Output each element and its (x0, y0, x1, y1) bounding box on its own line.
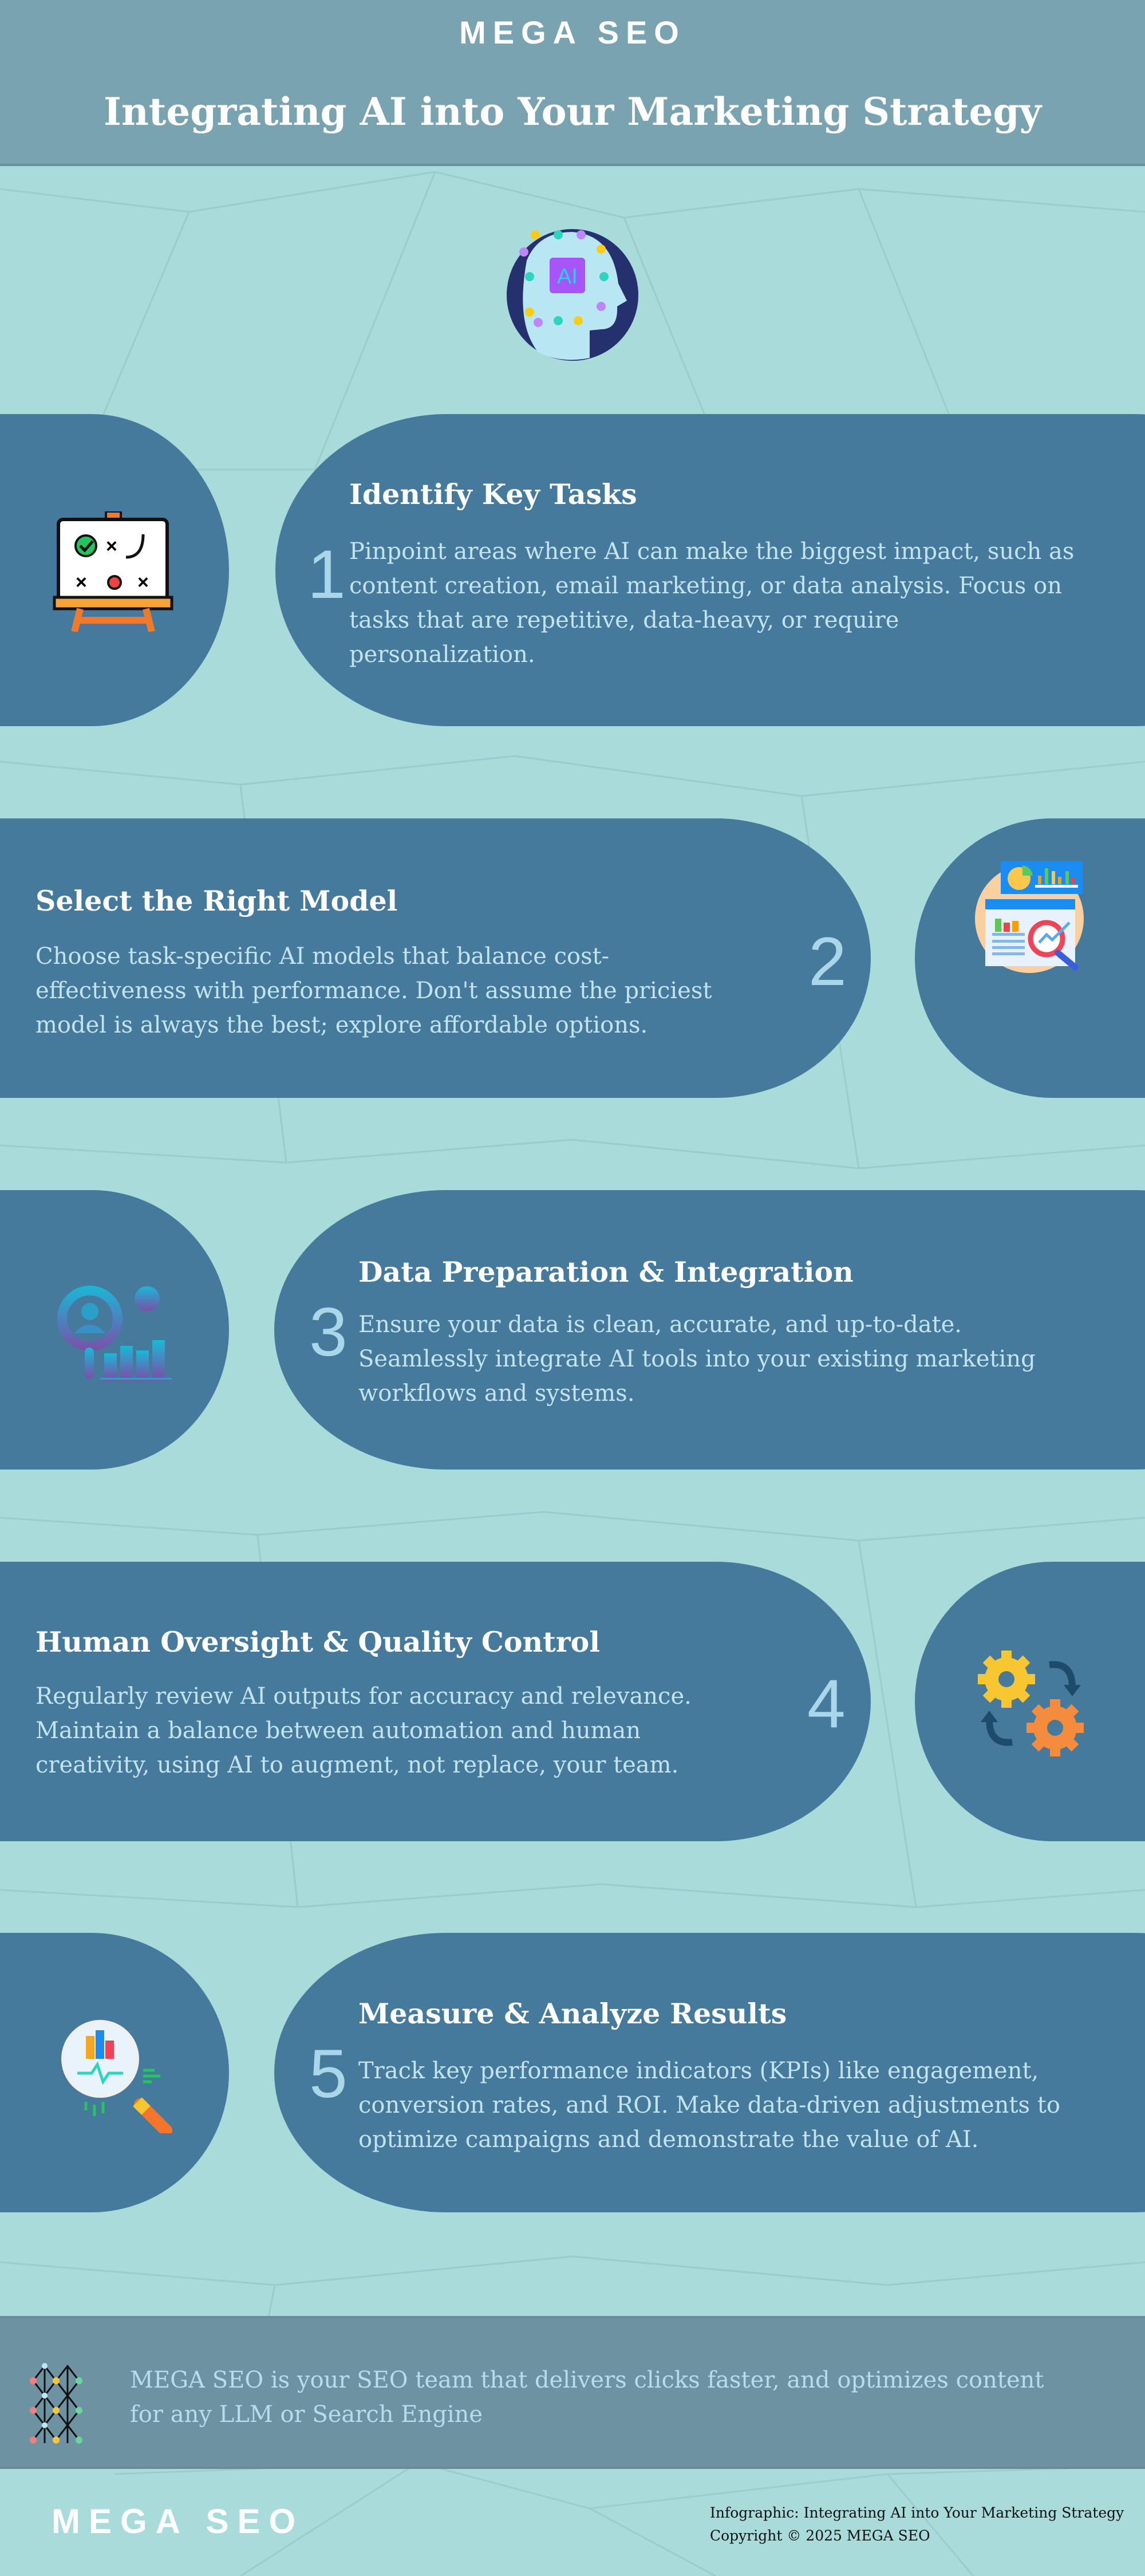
panel 1: identify key tasks (0, 414, 1145, 726)
panel 3 icon blob (0, 1190, 229, 1470)
icon: strategy board: × (137, 572, 149, 593)
body: Seamlessly integrate AI tools into your existing marketing (358, 1346, 1036, 1372)
body: personalization. (349, 641, 535, 668)
number 2: 2 (808, 923, 847, 1000)
footer band (0, 2316, 1145, 2469)
body: workflows and systems. (358, 1380, 634, 1407)
panel 3: data preparation (0, 1190, 1145, 1470)
header band (0, 0, 1145, 166)
icon: AI head: AI (557, 265, 578, 289)
body: effectiveness with performance. Don't assume the priciest (35, 978, 712, 1004)
tagline (130, 2367, 1044, 2428)
body: Pinpoint areas where AI can make the biggest impact, such as (349, 538, 1074, 565)
icon: analytics magnifier (61, 2020, 172, 2133)
body: Maintain a balance between automation and human (35, 1718, 641, 1744)
tagline: for any LLM or Search Engine (130, 2401, 483, 2428)
panel 1 icon blob (0, 414, 229, 726)
body: Choose task-specific AI models that balance cost- (35, 943, 609, 970)
icon: analytics dashboard (975, 861, 1084, 973)
body: optimize campaigns and demonstrate the value of AI. (358, 2126, 978, 2153)
panel 4 content pill (0, 1562, 871, 1841)
body (358, 1311, 1036, 1407)
footer credits (710, 2504, 1124, 2544)
footer credits: Copyright © 2025 MEGA SEO (710, 2527, 930, 2544)
number 1: 1 (307, 536, 346, 613)
heading: Data Preparation & Integration (358, 1255, 854, 1289)
footer brand: MEGA SEO (52, 2502, 304, 2540)
body: tasks that are repetitive, data-heavy, or require (349, 607, 899, 633)
icon: strategy board (53, 511, 173, 632)
panel 2 content pill (0, 818, 871, 1098)
body (358, 2058, 1060, 2153)
panel 5 content pill (274, 1933, 1145, 2212)
icon: strategy board: × (76, 572, 87, 593)
panel 4: human oversight (0, 1562, 1145, 1841)
icon: gears (978, 1651, 1084, 1756)
body (35, 1683, 692, 1778)
panel 5 icon blob (0, 1933, 229, 2212)
panel 1 content pill (275, 414, 1145, 726)
panel 2: select the right model (0, 818, 1145, 1098)
icon: neural network (30, 2363, 82, 2444)
tagline: MEGA SEO is your SEO team that delivers clicks faster, and optimizes content (130, 2367, 1044, 2393)
number 4: 4 (807, 1665, 846, 1742)
body: content creation, email marketing, or data analysis. Focus on (349, 573, 1062, 599)
heading: Select the Right Model (35, 884, 397, 917)
footer credits: Infographic: Integrating AI into Your Marketing Strategy (710, 2504, 1124, 2521)
body (349, 538, 1074, 668)
heading: Human Oversight & Quality Control (35, 1625, 600, 1659)
panel 4 icon blob (915, 1562, 1145, 1841)
header brand: MEGA SEO (459, 14, 686, 50)
icon: data search (57, 1286, 172, 1381)
panel 5: measure results (0, 1933, 1145, 2212)
body: creativity, using AI to augment, not replace, your team. (35, 1752, 678, 1778)
panel 3 content pill (274, 1190, 1145, 1470)
icon: strategy board: × (106, 535, 117, 557)
body: conversion rates, and ROI. Make data-driven adjustments to (358, 2092, 1060, 2118)
number 5: 5 (309, 2035, 348, 2112)
heading: Identify Key Tasks (349, 478, 637, 511)
panel 2 icon blob (915, 818, 1145, 1098)
icon: AI head (507, 229, 638, 361)
body: model is always the best; explore affordable options. (35, 1012, 647, 1038)
body (35, 943, 712, 1038)
title: Integrating AI into Your Marketing Strategy (104, 89, 1041, 134)
body: Regularly review AI outputs for accuracy and relevance. (35, 1683, 692, 1710)
body: Ensure your data is clean, accurate, and up-to-date. (358, 1311, 962, 1338)
body: Track key performance indicators (KPIs) like engagement, (358, 2058, 1039, 2084)
heading: Measure & Analyze Results (358, 1997, 787, 2030)
number 3: 3 (309, 1294, 348, 1370)
